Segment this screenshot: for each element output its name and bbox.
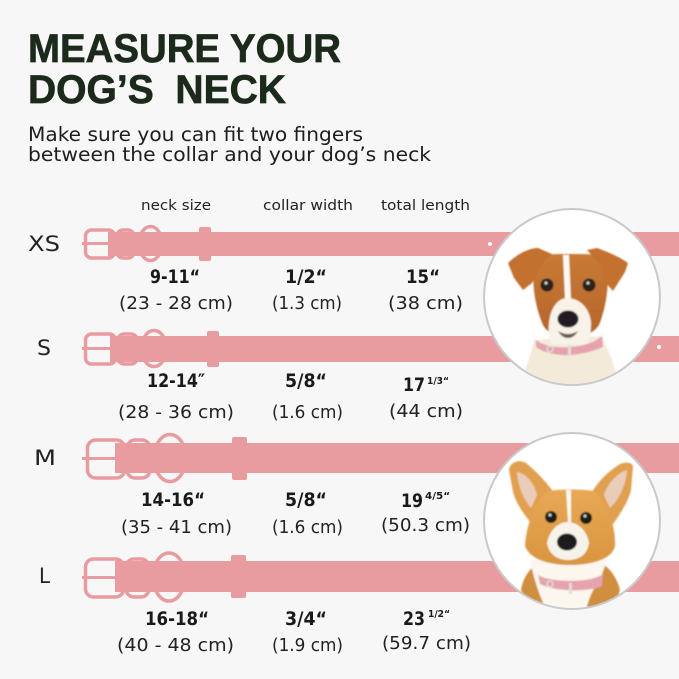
- values L: 3/4“: [285, 608, 327, 630]
- values S: [118, 370, 463, 423]
- values M: (1.6 cm): [272, 517, 343, 538]
- values XS: (1.3 cm): [272, 293, 342, 314]
- values S: 12-14″: [147, 370, 205, 392]
- values M: (50.3 cm): [381, 515, 470, 536]
- values S: 17: [403, 374, 425, 396]
- subtitle: Make sure you can fit two fingers: [28, 123, 363, 146]
- collar M: [82, 434, 679, 482]
- values XS: (38 cm): [388, 293, 463, 314]
- values M: [121, 489, 470, 538]
- title: [28, 27, 341, 112]
- collar L: [82, 553, 679, 601]
- values L: 16-18“: [145, 608, 209, 630]
- values L: 23: [403, 608, 425, 630]
- column headings: [141, 198, 470, 214]
- values L: (40 - 48 cm): [117, 635, 234, 656]
- values S: (44 cm): [389, 401, 463, 422]
- dog photo circle: corgi: [484, 433, 660, 615]
- values M: 14-16“: [141, 489, 205, 511]
- size row XS: [28, 226, 679, 314]
- subtitle: between the collar and your dog’s neck: [28, 143, 432, 166]
- values M: 4/5“: [425, 491, 450, 502]
- collar XS: [82, 226, 679, 261]
- values L: (59.7 cm): [382, 633, 471, 654]
- title: DOG’S NECK: [28, 68, 286, 112]
- subtitle: [28, 123, 432, 166]
- size label M: M: [34, 446, 56, 470]
- values S: (28 - 36 cm): [118, 402, 234, 423]
- size label L: L: [39, 564, 50, 588]
- column headings: neck size: [141, 198, 211, 214]
- size row M: [34, 434, 679, 538]
- values S: 1/3“: [427, 376, 449, 387]
- size row S: [37, 330, 679, 423]
- collar S: [82, 330, 679, 367]
- size label S: S: [37, 336, 51, 360]
- values M: (35 - 41 cm): [121, 517, 232, 538]
- values L: [117, 608, 471, 656]
- title: MEASURE YOUR: [28, 27, 341, 71]
- values XS: (23 - 28 cm): [119, 293, 233, 314]
- dog photo circle: terrier: [484, 209, 660, 385]
- values XS: 9-11“: [150, 266, 200, 288]
- values M: 19: [401, 490, 423, 512]
- values XS: [119, 266, 463, 314]
- values M: 5/8“: [285, 489, 327, 511]
- column headings: collar width: [263, 198, 353, 214]
- values L: (1.9 cm): [272, 635, 343, 656]
- size row L: [39, 553, 679, 656]
- size label XS: XS: [28, 232, 60, 256]
- values S: 5/8“: [285, 370, 327, 392]
- values XS: 15“: [406, 266, 440, 288]
- values S: (1.6 cm): [272, 402, 343, 423]
- values L: 1/2“: [428, 609, 450, 620]
- column headings: total length: [381, 198, 470, 214]
- values XS: 1/2“: [285, 266, 327, 288]
